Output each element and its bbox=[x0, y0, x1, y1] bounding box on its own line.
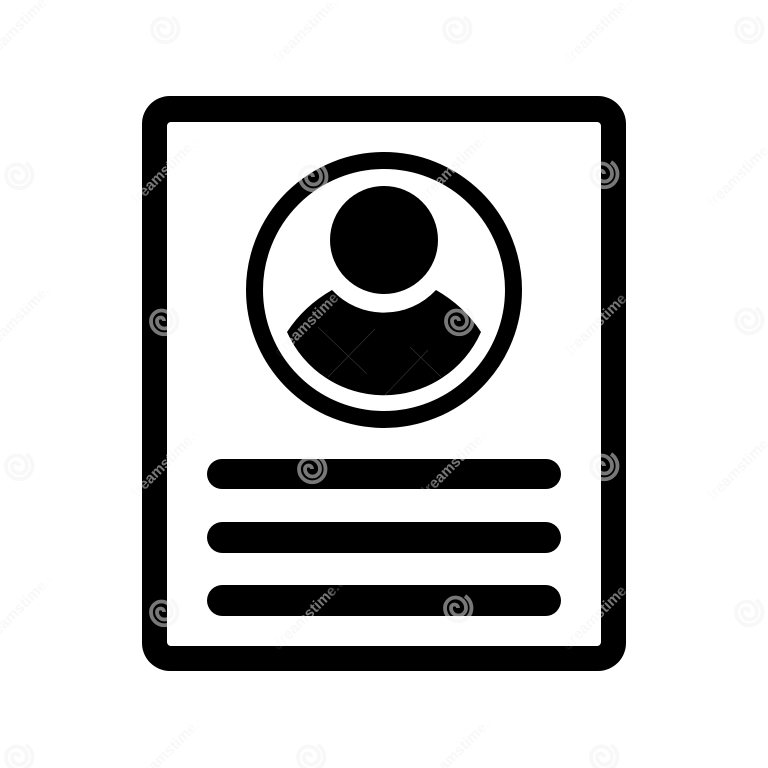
avatar ring bbox=[254, 160, 514, 420]
watermark overlay: dreamstime.com bbox=[269, 558, 365, 654]
avatar shoulders bbox=[287, 290, 481, 395]
watermark overlay: dreamstime.com bbox=[415, 110, 511, 206]
text line 3 bbox=[207, 585, 561, 616]
document page outline bbox=[142, 96, 626, 671]
watermark overlay: dreamstime.com bbox=[559, 558, 655, 654]
watermark overlay: dreamstime.com bbox=[125, 408, 221, 504]
watermark overlay: dreamstime.com bbox=[559, 266, 655, 362]
avatar head bbox=[330, 186, 438, 294]
text line 1 bbox=[207, 459, 561, 489]
text line 2 bbox=[207, 522, 561, 553]
watermark overlay: dreamstime.com bbox=[125, 115, 221, 211]
watermark overlay: dreamstime.com bbox=[271, 265, 367, 361]
watermark overlay: dreamstime.com bbox=[415, 407, 511, 503]
